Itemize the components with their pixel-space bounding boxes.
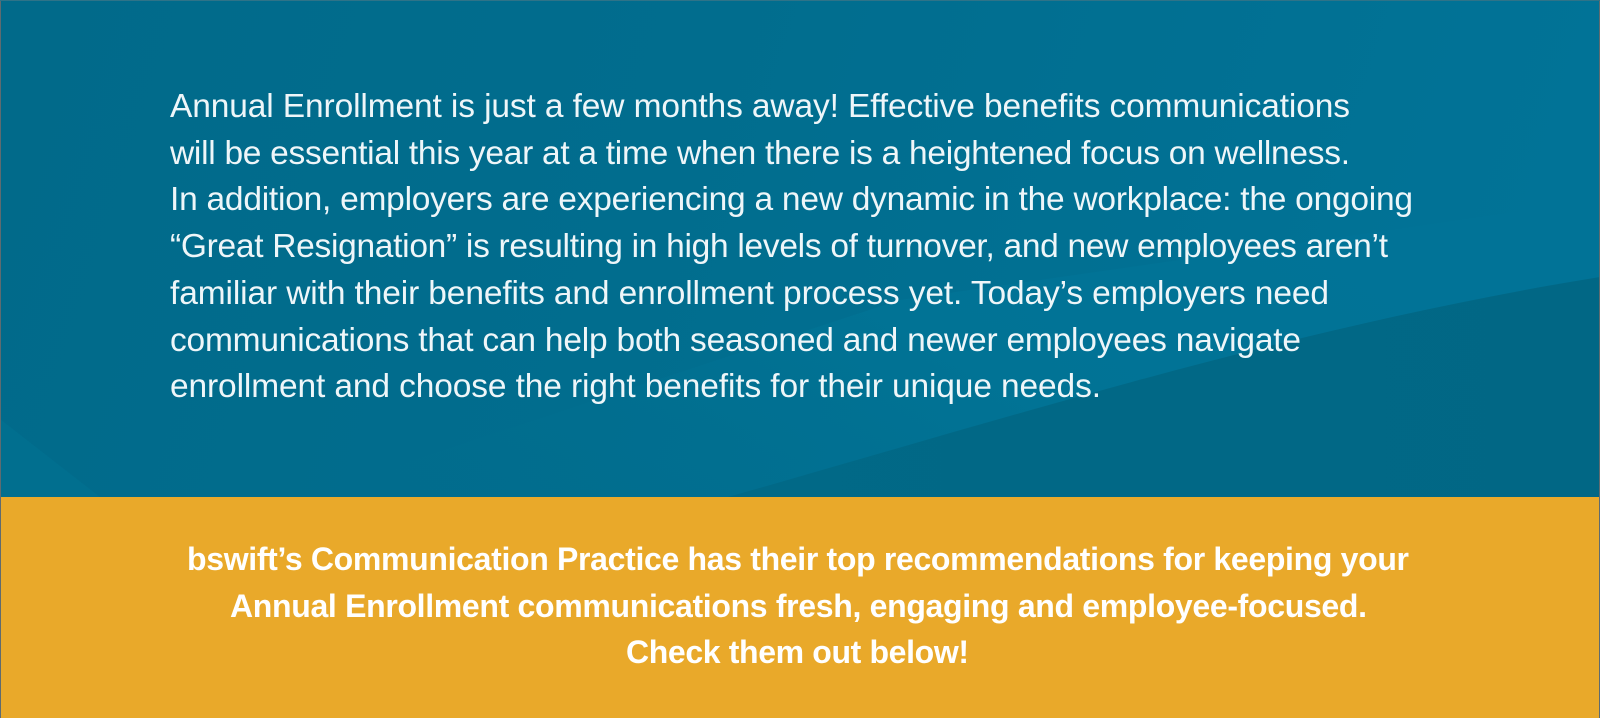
intro paragraph: enrollment and choose the right benefits for their unique needs.	[170, 368, 1101, 405]
panel: yellow call to action	[0, 497, 1600, 718]
intro paragraph: communications that can help both seasoned and newer employees navigate	[170, 322, 1301, 359]
intro paragraph: Annual Enrollment is just a few months away! Effective benefits communications	[170, 88, 1350, 125]
intro paragraph: In addition, employers are experiencing a new dynamic in the workplace: the ongoing	[170, 181, 1413, 218]
call to action text: bswift’s Communication Practice has their top recommendations for keeping your	[187, 541, 1409, 577]
intro paragraph: familiar with their benefits and enrollment process yet. Today’s employers need	[170, 275, 1329, 312]
call to action text: Annual Enrollment communications fresh, engaging and employee-focused.	[230, 588, 1367, 624]
intro paragraph: will be essential this year at a time when there is a heightened focus on wellness.	[169, 135, 1350, 172]
intro paragraph	[169, 88, 1413, 405]
call to action text	[187, 541, 1409, 670]
panel: teal introduction	[0, 0, 1600, 497]
intro paragraph: “Great Resignation” is resulting in high levels of turnover, and new employees aren’t	[170, 228, 1389, 265]
call to action text: Check them out below!	[626, 634, 969, 670]
